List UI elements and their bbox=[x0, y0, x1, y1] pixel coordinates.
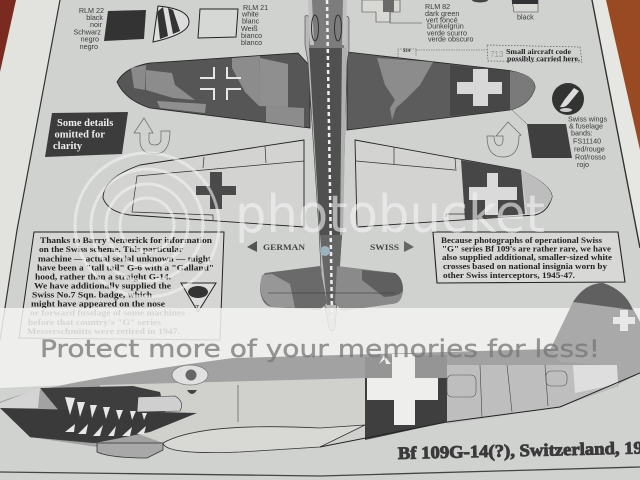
text box: Swiss crosses note: other Swiss interceptors, 1945-47. bbox=[443, 271, 575, 280]
text box: thanks note: have been a "tall tail" G-6 with a "Galland" bbox=[37, 264, 214, 272]
eye emblem bbox=[172, 365, 208, 394]
colour key: Swiss red: Rot/rosso bbox=[575, 152, 606, 162]
colour key: black bbox=[472, 0, 538, 22]
icon: No.7 Sqn badge: 7 bbox=[195, 305, 199, 312]
colour key: RLM 21 white: blanco bbox=[241, 38, 262, 47]
colour key: Swiss red: red/rouge bbox=[574, 144, 605, 154]
icon: Swiss white cross bbox=[457, 69, 502, 106]
radiator bbox=[97, 443, 163, 458]
callout: some details omitted: clarity bbox=[53, 141, 83, 152]
colour key: RLM 22 black: negro bbox=[81, 34, 99, 44]
colour key: Swiss red: FS11140 bbox=[573, 136, 601, 146]
text box: thanks note: before that country's "G" series bbox=[28, 318, 161, 327]
colour key: RLM 82 dark green: vert foncé bbox=[426, 16, 458, 24]
colour key: RLM 22 black: RLM 22 bbox=[79, 6, 104, 15]
colour key: Swiss red bbox=[512, 110, 608, 169]
colour key: RLM 21 white: Weiß bbox=[241, 24, 258, 33]
colour key: RLM 21 white: white bbox=[241, 10, 259, 18]
small aircraft code note: possibly carried here. bbox=[507, 55, 580, 63]
upper right wing: Swiss markings bbox=[347, 52, 535, 130]
text box: Swiss crosses note bbox=[433, 232, 625, 283]
callout: some details omitted: Some details bbox=[57, 118, 113, 129]
colour key: RLM 22 black bbox=[73, 6, 146, 51]
overexposed band bbox=[0, 308, 640, 388]
colour key: RLM 21 white: blanc bbox=[242, 16, 260, 26]
arrow: left flip arrow bbox=[134, 118, 170, 154]
text box: Swiss crosses note: "G" series Bf 109's are rather rare, we have bbox=[442, 244, 611, 254]
colour key: Swiss red: Swiss wings bbox=[568, 114, 608, 124]
colour key: RLM 21 white: RLM 21 bbox=[243, 3, 268, 12]
fuselage band bbox=[365, 378, 447, 440]
colour key: RLM 21 white bbox=[198, 3, 268, 47]
callout: some details omitted bbox=[45, 112, 128, 157]
text box: thanks note: machine — actual serial unknown — might bbox=[38, 254, 211, 264]
wing root fairing bbox=[163, 425, 365, 453]
text box: thanks note: hood, rather than a straight G-14. bbox=[35, 272, 171, 282]
text box: Swiss crosses note: crosses based on national insignia worn by bbox=[443, 262, 608, 271]
lower jaw bbox=[0, 408, 197, 443]
small aircraft code note bbox=[398, 45, 582, 63]
colour key: RLM 82 dark green bbox=[362, 0, 474, 44]
small aircraft code note: 713 bbox=[490, 50, 504, 59]
icon: German cross bbox=[200, 67, 241, 100]
text box: thanks note bbox=[19, 232, 224, 340]
upper left wing: German markings bbox=[117, 53, 310, 128]
upper nose dark bbox=[40, 386, 165, 412]
aircraft title: Bf 109G-14(?), Switzerland, 19 bbox=[398, 437, 640, 463]
national cross bbox=[367, 354, 438, 425]
colour key: RLM 22 black: negro bbox=[80, 42, 98, 51]
text box: thanks note: on the Swiss scheme. This particular bbox=[39, 245, 183, 254]
colour key: RLM 22 black: noir bbox=[90, 20, 103, 29]
text box: thanks note: might have appeared on the nose bbox=[31, 300, 165, 308]
icon: striped spinner bbox=[153, 6, 189, 42]
label: Swiss side: SWISS bbox=[370, 243, 400, 252]
text box: Swiss crosses note: Because photographs of operational Swiss bbox=[441, 236, 602, 245]
lower right wing bbox=[355, 140, 552, 227]
colour key: RLM 22 black: black bbox=[86, 13, 103, 22]
small aircraft code note: $14 bbox=[403, 49, 411, 54]
exhaust panel bbox=[137, 396, 182, 412]
colour key: RLM 82 dark green: verde obscuro bbox=[428, 34, 474, 44]
colour key: Swiss red: & fuselage bbox=[569, 122, 603, 130]
lower left wing bbox=[103, 140, 304, 227]
text box: thanks note: Swiss No.7 Sqn. badge, which bbox=[32, 290, 153, 300]
tailplane bbox=[260, 266, 403, 311]
icon: No.7 Sqn badge bbox=[181, 283, 216, 312]
small aircraft code note: Small aircraft code bbox=[506, 48, 571, 56]
canopy glazing bbox=[0, 388, 40, 408]
colour key: RLM 82 dark green: dark green bbox=[425, 9, 459, 18]
colour key: Swiss red: rojo bbox=[577, 160, 589, 169]
fuselage plan view bbox=[305, 0, 349, 331]
colour key: RLM 22 black: Schwarz bbox=[73, 28, 101, 36]
arrow: right flip arrow bbox=[487, 122, 521, 157]
colour key: RLM 21 white: bianco bbox=[241, 31, 262, 40]
fuselage body bbox=[0, 349, 618, 447]
text box: thanks note: Messerschmitts were retired in 1947. bbox=[27, 327, 180, 336]
aircraft side view bbox=[0, 283, 640, 458]
colour key: RLM 82 dark green: verde scurro bbox=[427, 28, 467, 38]
text box: thanks note: Thanks to Barry Nemerick for information bbox=[40, 236, 213, 245]
colour key: RLM 82 dark green: Dunkelgrün bbox=[427, 22, 464, 30]
text box: Swiss crosses note: also supplied additional, smaller-sized white bbox=[442, 253, 612, 262]
text box: thanks note: We have additionally supplied the bbox=[34, 282, 171, 290]
label: German side: GERMAN bbox=[263, 243, 305, 252]
colour key: black: black bbox=[517, 12, 534, 22]
callout: some details omitted: omitted for bbox=[54, 130, 105, 140]
watermark: protect more: Protect more of your memories for less! bbox=[40, 335, 600, 363]
label: German side bbox=[247, 241, 305, 252]
label: Swiss side bbox=[370, 241, 414, 252]
shark teeth bbox=[65, 397, 147, 436]
watermark: photobucket: photobucket bbox=[235, 185, 545, 245]
text box: thanks note: or forward fuselage of some machines bbox=[30, 308, 185, 318]
colour key: Swiss red: bands: bbox=[571, 128, 593, 138]
colour key: RLM 82 dark green: RLM 82 bbox=[425, 2, 450, 11]
icon: paint brush bbox=[552, 83, 584, 115]
watermark rings bbox=[75, 153, 219, 297]
fin and rudder bbox=[550, 283, 640, 385]
